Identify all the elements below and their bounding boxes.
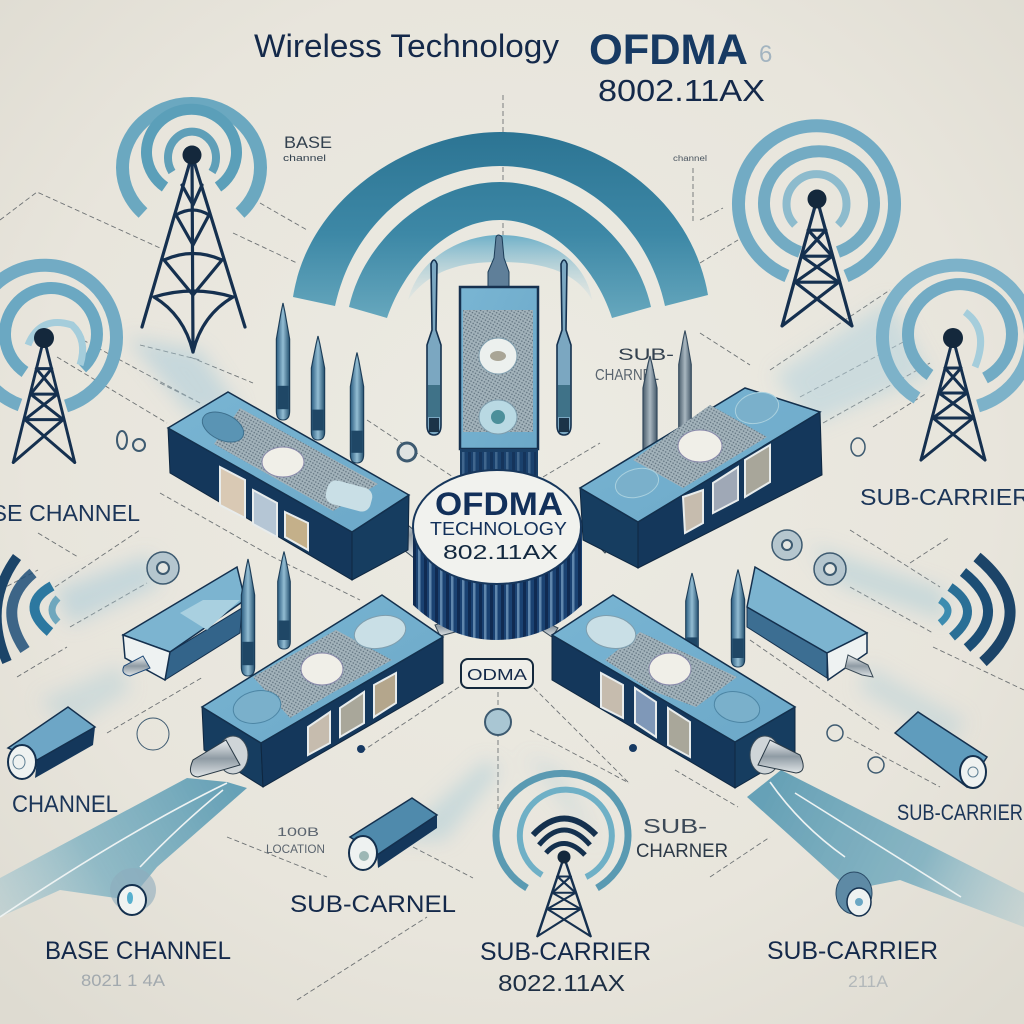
face: top (168, 392, 409, 532)
label: base small: channel (283, 153, 326, 163)
windows (308, 712, 330, 755)
device plug (123, 656, 150, 676)
tower: left (0, 265, 116, 462)
icon: wifi waves left (0, 557, 58, 662)
puck: bottom right (836, 872, 872, 916)
hub text: OFDMA (435, 486, 563, 522)
label: sub channel centre right (595, 345, 674, 384)
hub text: TECHNOLOGY (430, 519, 567, 539)
face: end (352, 495, 409, 580)
device top (123, 567, 245, 652)
face: side (552, 635, 735, 788)
connector: lower right outer (750, 736, 803, 774)
label: sub channel centre right: SUB- (618, 345, 674, 364)
router mesh (463, 310, 533, 432)
label: small bottom centre-left (266, 825, 325, 856)
face: end (580, 488, 638, 568)
label: sub-charner: SUB- (643, 816, 707, 838)
pad (612, 464, 662, 502)
beam: lower left (0, 778, 247, 917)
subtitle: standard: 8002.11AX (598, 73, 765, 108)
title: faded digit: 6 (759, 41, 772, 68)
antennas: upper right router (643, 330, 691, 460)
windows (220, 467, 245, 518)
pad (711, 688, 763, 726)
windows (601, 673, 623, 718)
label: sub-carrier right: SUB-CARRIER (860, 484, 1024, 510)
label: base small: BASE (284, 133, 332, 152)
connector: lower right to hub (530, 617, 558, 637)
router ribbed base (460, 449, 538, 481)
router body (460, 287, 538, 449)
outer arc (293, 132, 708, 306)
face: end (202, 707, 263, 787)
central vertical router (460, 235, 538, 481)
device top (747, 567, 867, 653)
label: base small (283, 133, 332, 163)
small device: right (747, 567, 873, 680)
connector: upper right to hub (583, 512, 623, 553)
face: end (735, 707, 795, 788)
faint signal beams (40, 300, 965, 850)
face: side (168, 428, 352, 580)
tower: top left (122, 103, 260, 352)
connector: upper left to hub (372, 512, 420, 558)
label: sub-carrier centre: 8022.11AX (498, 970, 625, 996)
face: side (261, 637, 443, 787)
connector: lower left to hub (435, 617, 463, 636)
indicator (262, 447, 304, 477)
label: sub-carrier bottom right: 211A (848, 972, 889, 991)
label: small top right: channel (673, 154, 707, 163)
label: sub-carnel: SUB-CARNEL (290, 891, 456, 918)
device end (123, 635, 170, 680)
label: small bottom centre-left: 100B (277, 825, 319, 839)
label: sub-charner (636, 816, 728, 862)
device end (827, 633, 867, 680)
keypad (198, 406, 248, 448)
mesh panel (214, 408, 378, 511)
label: base channel (45, 937, 231, 990)
top antenna stub (488, 235, 509, 287)
ODMA badge (461, 659, 533, 688)
label: sub-carrier centre (480, 938, 651, 996)
label: base channel: 8021 1 4A (81, 971, 166, 990)
label: channel lower left: CHANNEL (12, 791, 118, 818)
pad (583, 611, 639, 653)
router indicator top (479, 338, 517, 374)
router: lower left (202, 595, 443, 787)
middle arc (349, 182, 651, 318)
pad (351, 611, 409, 653)
router: lower right (552, 595, 795, 788)
hub text: 802.11AX (443, 542, 558, 564)
tower: right (882, 265, 1024, 460)
title: OFDMA: OFDMA (589, 26, 748, 74)
face: top (202, 595, 443, 743)
windows (683, 490, 703, 533)
mesh panel (253, 630, 392, 718)
pad (732, 388, 782, 428)
cylinder device: bottom centre (349, 798, 437, 870)
hub ribbed body (413, 527, 582, 640)
antennas: vertical router (427, 260, 571, 435)
central broadcast arcs (293, 132, 708, 318)
cylinder device: far right (895, 712, 987, 788)
label: sub-carrier bottom right (767, 937, 938, 991)
antennas: small devices (241, 552, 745, 676)
face: side (638, 412, 822, 568)
label: base channel: BASE CHANNEL (45, 937, 231, 965)
label: sub-charner: CHARNER (636, 841, 728, 862)
icon: wifi waves right (940, 557, 1010, 662)
antenna right (557, 260, 571, 435)
tower: bottom (496, 773, 628, 936)
connector: lower left outer (190, 736, 248, 777)
router: upper left (168, 392, 409, 580)
title: wireless technology: Wireless Technology (254, 28, 559, 64)
device plug (845, 655, 873, 677)
pad (230, 686, 284, 728)
label: sub-carrier centre: SUB-CARRIER (480, 938, 651, 966)
beam: lower right (747, 770, 1024, 927)
central hub (413, 470, 582, 640)
router indicator bottom (479, 400, 517, 434)
hub label plate (413, 470, 581, 584)
label: sub channel centre right: CHARNEL (595, 367, 659, 384)
pad (324, 478, 374, 514)
mesh panel (605, 632, 737, 707)
device side (165, 608, 242, 680)
title (254, 26, 772, 108)
label: small bottom centre-left: LOCATION (266, 842, 325, 856)
inner faint arc (408, 235, 592, 300)
face: top (552, 595, 795, 742)
indicator (301, 653, 343, 685)
device panel (180, 600, 240, 630)
small node icons (117, 431, 884, 773)
indicator (678, 430, 722, 462)
puck: bottom left (110, 868, 156, 915)
device side (747, 607, 827, 678)
indicator (649, 653, 691, 685)
antenna left (427, 260, 441, 435)
tower: top right (738, 126, 895, 326)
small device: left (123, 567, 245, 680)
router: upper right (580, 388, 822, 568)
antennas: upper left router (276, 303, 364, 463)
label: sub-carrier bottom right: SUB-CARRIER (767, 937, 938, 965)
mesh panel (633, 405, 767, 488)
face: top (580, 388, 820, 522)
ODMA badge: ODMA (467, 667, 527, 684)
cylinder device: far left (8, 707, 95, 779)
